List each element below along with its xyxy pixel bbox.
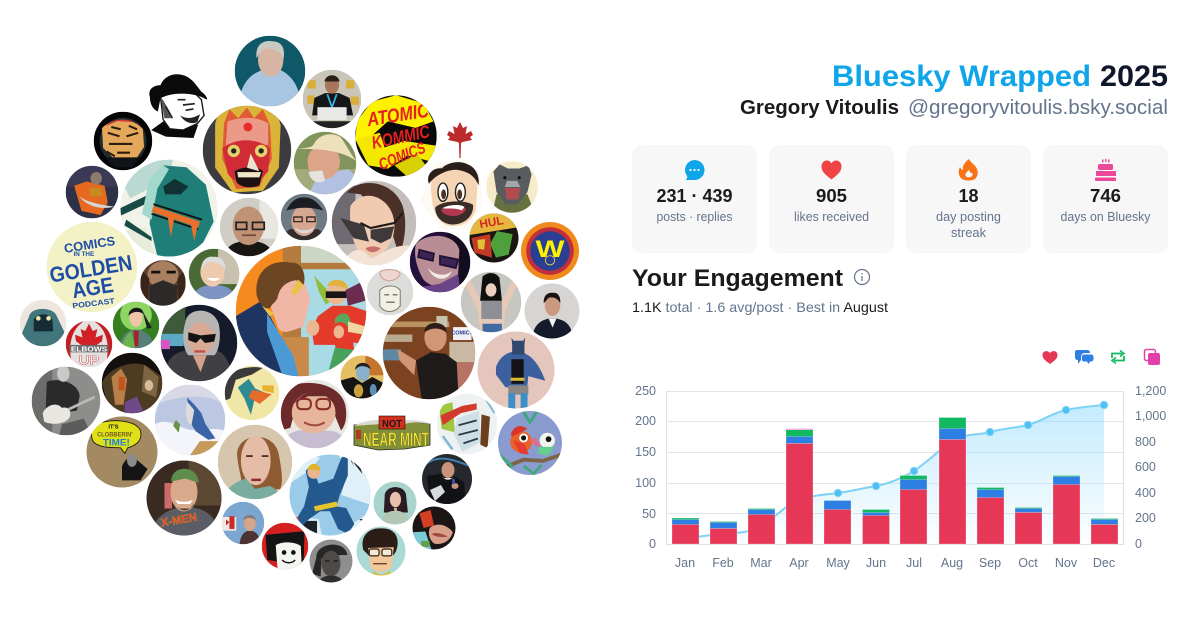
month labels (675, 556, 1115, 570)
avatar: man in cowboy hat (294, 132, 358, 194)
author name and handle: Gregory Vitoulis (740, 97, 899, 119)
avatar: teal comic character on yellow (225, 366, 279, 420)
avatar cluster (20, 36, 580, 582)
left axis labels: 250 (635, 384, 656, 398)
stat card: likes received: likes received (794, 210, 869, 224)
month labels: May (826, 556, 851, 570)
left axis labels: 200 (635, 414, 656, 428)
avatar: two cartoon birds (498, 411, 562, 475)
stat card: days on Bluesky: days on Bluesky (1060, 210, 1151, 224)
stat card: day posting streak: streak (951, 226, 987, 240)
stat card: likes received (769, 145, 894, 253)
avatar: man in cap and X-Men shirt (146, 460, 222, 536)
avatar: Comics in the Golden Age podcast logo: PODCAST (72, 296, 115, 310)
avatar: red cartoon with white face (262, 523, 308, 569)
author name and handle (740, 97, 1168, 119)
title: Bluesky Wrapped (832, 60, 1091, 93)
month labels: Apr (789, 556, 809, 570)
right axis labels (1135, 384, 1166, 551)
avatar: man in green suit (113, 299, 159, 348)
avatar: It's Clobberin' Time pin on cork (86, 416, 158, 488)
combo chart: monthly engagement bars with cumulative line (635, 384, 1166, 570)
title: 2025 (1100, 60, 1168, 93)
avatar: blue caped superhero in snow (290, 454, 370, 536)
icon: heart (822, 161, 842, 180)
icon: red maple leaf (447, 122, 473, 158)
month labels: Feb (712, 556, 734, 570)
avatar: man with purple tint and glasses (410, 232, 470, 292)
month labels: Oct (1018, 556, 1038, 570)
avatar: cartoon man with curly hair (356, 526, 406, 576)
avatar: Elbows Up maple leaf logo (66, 321, 112, 367)
cumulative points (834, 401, 1108, 497)
icon: heart likes (1042, 351, 1058, 364)
avatar: woman in sage blouse (374, 482, 416, 524)
avatar: dark masked woman (140, 260, 186, 306)
avatar: man at convention table (303, 70, 361, 128)
icon: speech bubble (685, 160, 705, 180)
avatar: orange rock creature (94, 112, 152, 170)
avatar: woman with glasses and auburn hair (281, 380, 349, 448)
stat card: day posting streak (906, 145, 1031, 253)
avatar: Elbows Up maple leaf logo: ELBOWS (71, 344, 107, 353)
avatar: Comics in the Golden Age podcast logo (47, 222, 137, 312)
avatar: red comic book cover: HUL (479, 214, 505, 231)
avatar: woman with sunglasses (332, 181, 416, 265)
avatar: green frog creature (20, 300, 66, 346)
chart legend icons (1042, 350, 1160, 365)
avatar: It's Clobberin' Time pin on cork: TIME! (103, 438, 130, 448)
icon: chat replies (1075, 350, 1094, 364)
month labels: Nov (1055, 556, 1078, 570)
left axis labels: 50 (642, 507, 656, 521)
icon: quote copies (1144, 350, 1160, 365)
avatar: smiling older man (189, 249, 239, 299)
month labels: Mar (750, 556, 772, 570)
avatar: grey-haired woman in sunglasses (161, 305, 237, 381)
right axis labels: 400 (1135, 486, 1156, 500)
avatar: man in hat and glasses (281, 194, 327, 240)
avatar: Comics in the Golden Age podcast logo: AGE (70, 272, 115, 303)
section heading: Your Engagement: Your Engagement (632, 265, 843, 292)
avatar: Atomic Kommic Comics logo: ATOMIC (365, 100, 431, 131)
icon: info (854, 270, 870, 284)
avatar: comic group on dark background (102, 353, 162, 413)
avatar: Elbows Up maple leaf logo: UP (79, 352, 100, 367)
engagement summary: 1.1K total · 1.6 avg/post · Best in August (632, 299, 888, 315)
grid lines (666, 392, 1124, 514)
avatar: W logo badge: W (535, 236, 565, 263)
avatar: man with white hair (235, 36, 305, 106)
avatar: green robot comic panel (120, 160, 218, 256)
avatar: bald man with glasses (220, 198, 278, 256)
avatar: W logo badge (521, 222, 579, 280)
avatar: zombie flaming face (203, 106, 291, 194)
avatar: Comics in the Golden Age podcast logo: IN THE (73, 251, 94, 258)
avatar: big comic panel man and hero (236, 246, 366, 376)
stat card: posts and replies: 231 · 439 (656, 186, 732, 206)
avatar: man in dark suit (524, 284, 580, 338)
avatar: man speaking at microphone (422, 454, 472, 504)
logo: Not Near Mint: NOT (382, 419, 402, 430)
avatar: red comic book cover (470, 214, 518, 262)
avatar: woman with black hair flexing (461, 272, 521, 332)
stat card: day posting streak: 18 (958, 186, 978, 206)
stat card: days on Bluesky (1043, 145, 1168, 253)
right axis labels: 1,000 (1135, 409, 1166, 423)
avatar: Batman action figure (478, 332, 554, 408)
avatar: woman in black and white (310, 540, 352, 582)
icon: birthday cake (1095, 159, 1116, 181)
icon: flame (959, 159, 978, 180)
month labels: Jun (866, 556, 886, 570)
cumulative line (685, 405, 1104, 539)
avatar: Atomic Kommic Comics logo: KOMMIC (370, 121, 432, 153)
avatar: pencil sketch (367, 269, 413, 315)
right axis labels: 600 (1135, 460, 1156, 474)
axes (666, 391, 1124, 544)
right axis labels: 1,200 (1135, 384, 1166, 398)
logo: Not Near Mint: NEAR MINT (363, 430, 429, 451)
avatar: grey bear (486, 161, 538, 213)
stat card: posts and replies (632, 145, 757, 253)
avatar: man in bookstore: COMICS (451, 331, 474, 337)
avatar: It's Clobberin' Time pin on cork: IT'S (108, 425, 119, 431)
right axis labels: 800 (1135, 435, 1156, 449)
month labels: Sep (979, 556, 1001, 570)
avatar: It's Clobberin' Time pin on cork: CLOBBERIN' (97, 431, 133, 438)
left axis labels: 150 (635, 445, 656, 459)
avatar: collage with red sign and mouth (412, 506, 456, 550)
avatar: cartoon man with beard (420, 160, 483, 230)
month labels: Aug (941, 556, 963, 570)
left axis labels: 100 (635, 476, 656, 490)
month labels: Dec (1093, 556, 1115, 570)
avatar: man with guitar (32, 365, 100, 435)
right axis labels: 200 (1135, 511, 1156, 525)
stat card: posts and replies: posts · replies (656, 210, 732, 224)
month labels: Jan (675, 556, 695, 570)
author name and handle: @gregoryvitoulis.bsky.social (908, 97, 1168, 119)
avatar: Comics in the Golden Age podcast logo: GOLDEN (48, 250, 134, 288)
right axis labels: 0 (1135, 537, 1142, 551)
avatar: Comics in the Golden Age podcast logo: COMICS (63, 234, 116, 256)
cumulative area (685, 405, 1104, 544)
avatar: dark-haired comic hero small (340, 356, 384, 398)
stat card: days on Bluesky: 746 (1090, 186, 1121, 206)
logo: Not Near Mint (354, 416, 430, 451)
avatar: man in cap and X-Men shirt: X-MEN (160, 511, 198, 530)
stacked bars (672, 418, 1118, 544)
avatar: Atomic Kommic Comics logo (355, 95, 437, 177)
stat card: day posting streak: day posting (936, 210, 1001, 224)
avatar: man with Canadian flag (222, 502, 264, 544)
avatar: person with orange jacket holding fish (66, 166, 118, 218)
avatar: woman with auburn hair (218, 425, 292, 499)
avatar: Atomic Kommic Comics logo: COMICS (376, 139, 428, 174)
month labels: Jul (906, 556, 922, 570)
avatar: white turtle comic panel (437, 394, 497, 454)
stat card: likes received: 905 (816, 186, 847, 206)
icon: repost arrows (1112, 350, 1124, 364)
left axis labels: 0 (649, 537, 656, 551)
avatar: man in bookstore (383, 307, 475, 399)
avatar: inked man in bowler hat (149, 74, 207, 138)
avatar: blue jay on snow (155, 385, 225, 455)
left axis labels (635, 384, 656, 551)
